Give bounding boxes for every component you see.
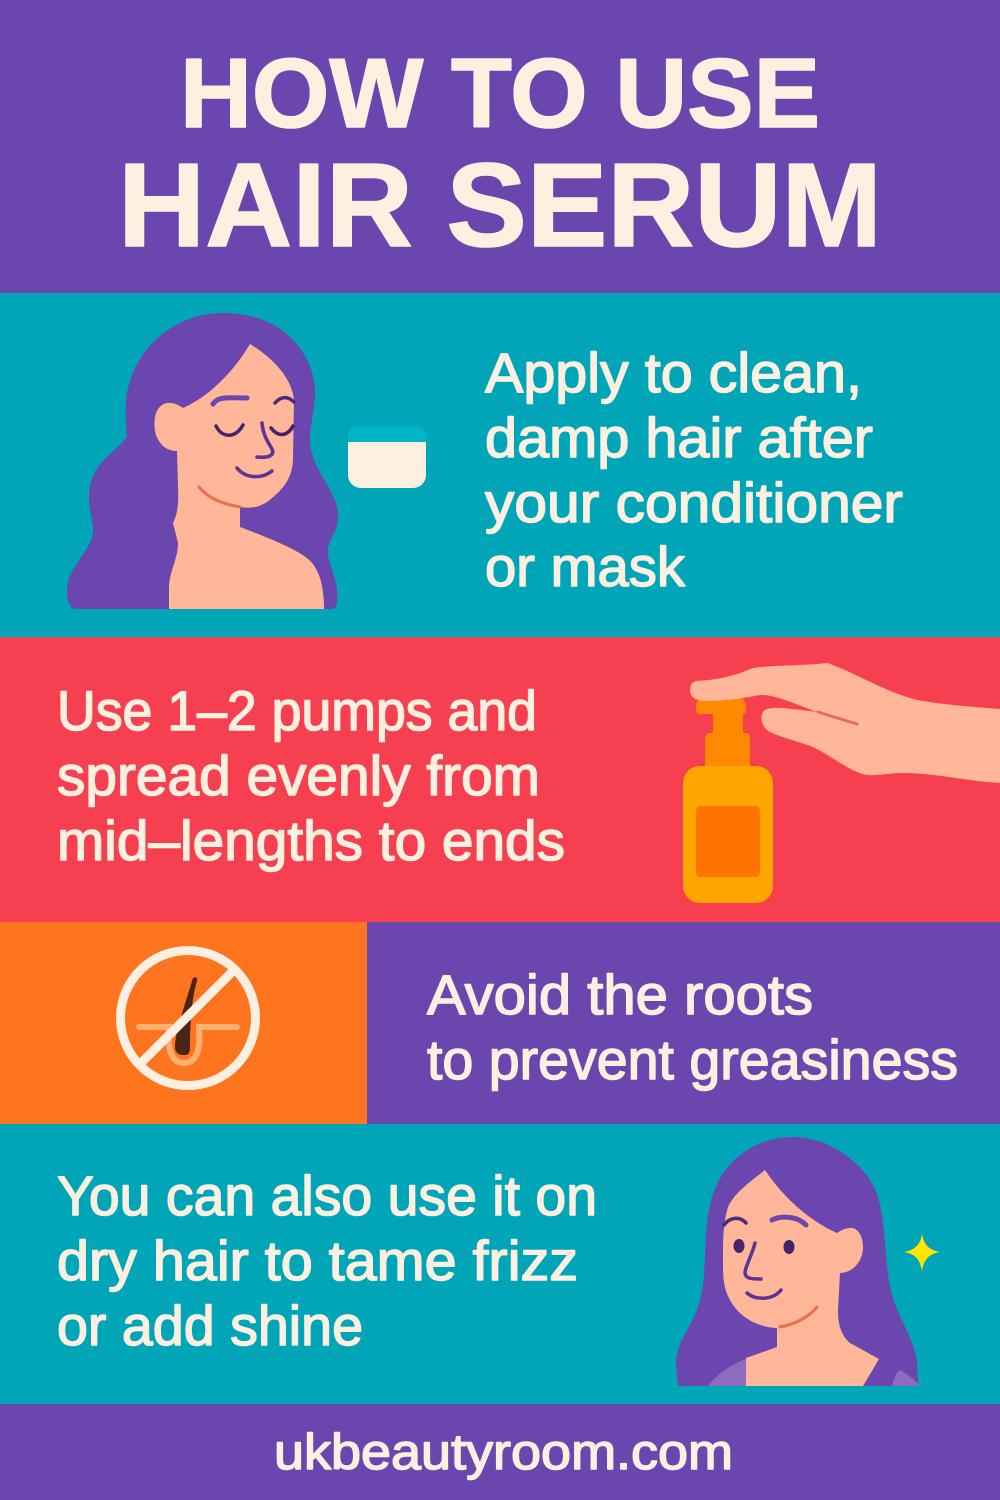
footer website: ukbeautyroom.com <box>274 1424 733 1480</box>
step 1 text <box>485 341 903 598</box>
nose <box>257 423 273 457</box>
step 4 text: or add shine <box>57 1294 363 1357</box>
panel: step 4 dry hair <box>0 1124 1000 1404</box>
skin line <box>139 1024 237 1030</box>
eyes <box>734 1239 744 1253</box>
step 4 text: You can also use it on <box>57 1164 597 1227</box>
icon: pump bottle <box>683 698 773 903</box>
step 1 text: your conditioner <box>485 471 903 534</box>
brows <box>724 1218 746 1225</box>
illustration: woman with closed eyes <box>67 313 338 609</box>
step 3 text <box>427 963 958 1091</box>
chin line <box>780 1307 817 1327</box>
closed eyes <box>216 425 293 435</box>
follicle <box>169 1030 199 1063</box>
step 2 text: mid–lengths to ends <box>57 809 565 872</box>
illustration: hand pressing pump <box>690 663 1000 783</box>
panel: step 1 apply <box>0 293 1000 637</box>
panel: step 3 orange icon block <box>0 922 367 1124</box>
mouth <box>747 1290 781 1298</box>
brows <box>213 398 247 404</box>
illustration: smiling woman <box>676 1137 920 1386</box>
panel: footer <box>0 1404 1000 1500</box>
clothing <box>708 1359 920 1386</box>
icon: serum jar <box>348 426 426 488</box>
mouth <box>237 468 272 477</box>
hair strand <box>175 977 197 1055</box>
step 3 text: to prevent greasiness <box>427 1028 958 1091</box>
title line one: HOW TO USE <box>180 38 820 148</box>
step 4 text: dry hair to tame frizz <box>57 1229 578 1292</box>
step 2 text <box>57 679 565 872</box>
step 4 text <box>57 1164 597 1357</box>
icon: sparkle <box>904 1234 940 1271</box>
panel: step 2 pumps <box>0 637 1000 922</box>
step 1 text: or mask <box>485 535 686 598</box>
panel: step 3 purple text block <box>367 922 1000 1124</box>
step 1 text: damp hair after <box>485 406 873 469</box>
step 2 text: spread evenly from <box>57 744 540 807</box>
title line two: HAIR SERUM <box>118 139 882 272</box>
chin line <box>199 487 240 507</box>
step 2 text: Use 1–2 pumps and <box>57 679 537 742</box>
nose <box>745 1243 761 1279</box>
prohibition ring <box>120 950 256 1086</box>
panel: title banner <box>0 0 1000 293</box>
icon: no hair root sign <box>120 950 256 1086</box>
step 1 text: Apply to clean, <box>485 341 862 404</box>
step 3 text: Avoid the roots <box>427 963 813 1026</box>
